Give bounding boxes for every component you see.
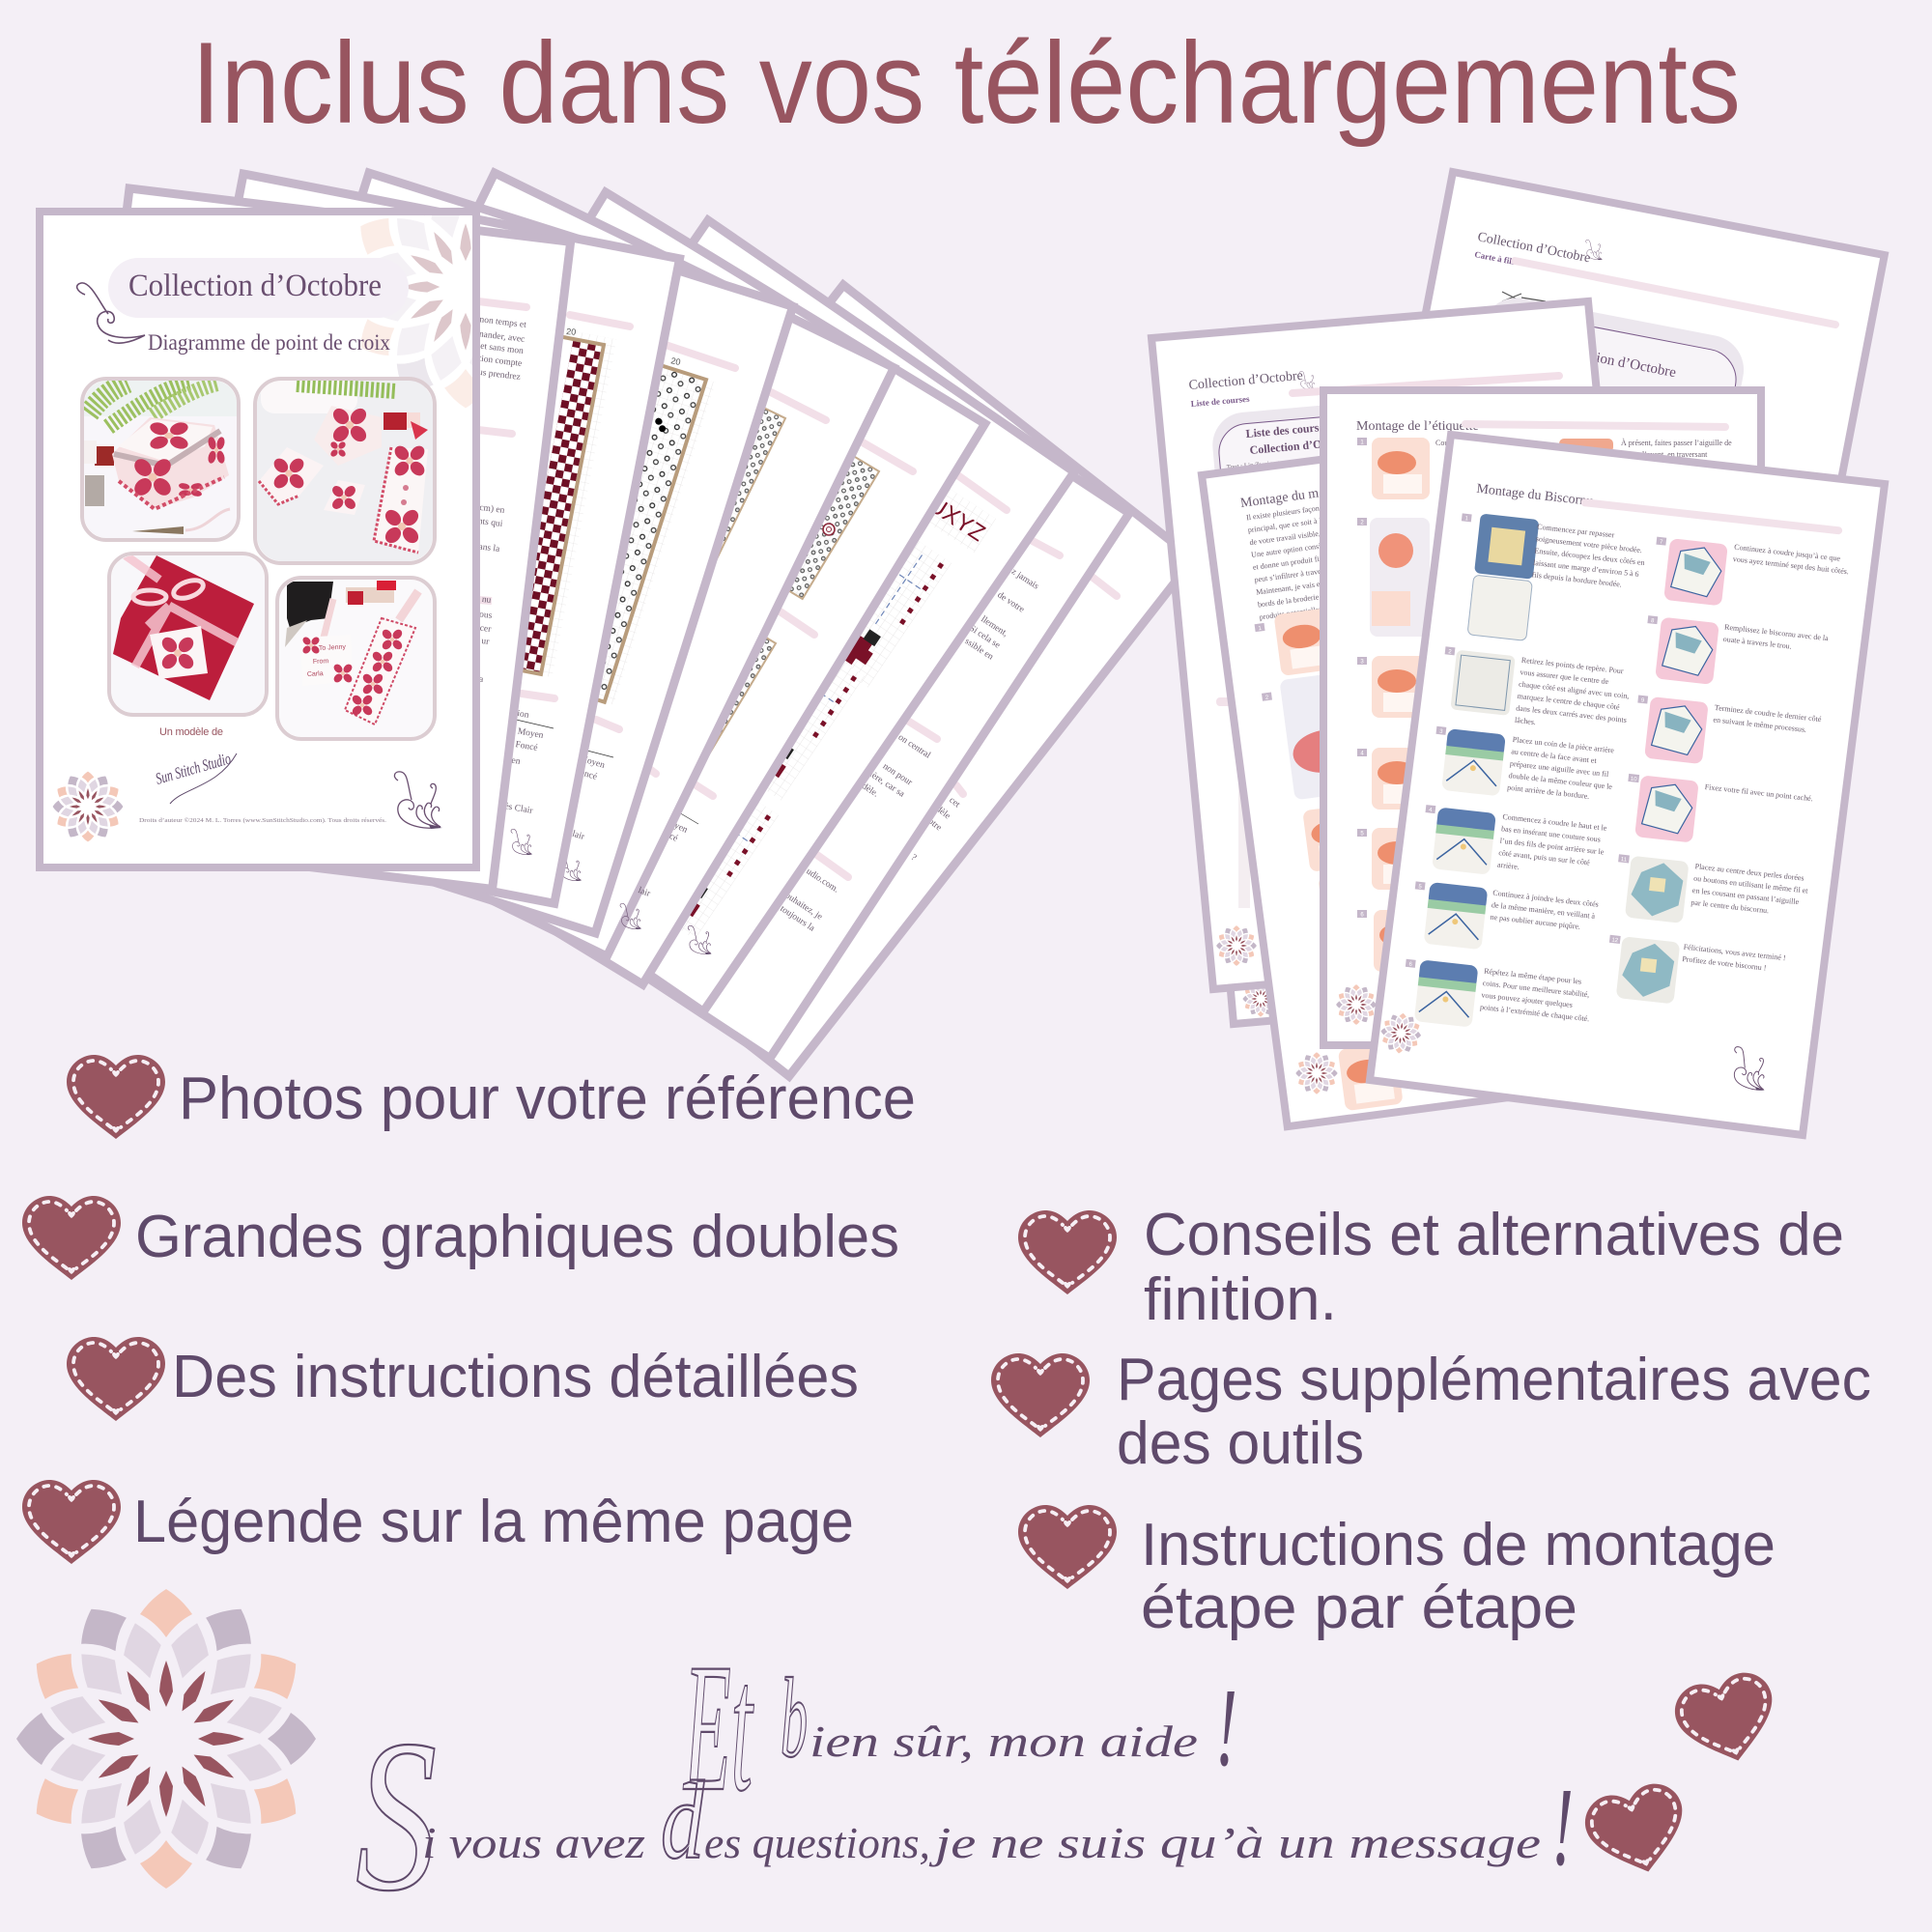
right column steps: ou boutons en utilisant le même fil et xyxy=(1693,874,1809,895)
page: montage du manchon: peut s’infiltrer à travers xyxy=(1254,566,1327,584)
page behind shopping list xyxy=(1176,333,1623,1024)
page 4 xyxy=(208,173,894,956)
photo: trio of ornaments xyxy=(255,379,437,564)
right column steps xyxy=(1604,534,1851,1018)
page: liste de courses: Collection d’Octobre xyxy=(1188,369,1303,393)
cover flourish xyxy=(77,283,145,343)
heart: tilted upper xyxy=(1669,1666,1786,1774)
page 8: ? xyxy=(909,853,918,863)
page: montage du manchon: et donne un produit fini xyxy=(1252,554,1326,572)
bullet: finishing tips: finition. xyxy=(1144,1266,1337,1333)
left column steps: l’un des fils de point arrière sur le xyxy=(1499,837,1605,857)
page 8: dèle xyxy=(934,805,952,821)
title pill xyxy=(108,258,409,318)
page: montage du manchon: bords de la broderie. Ces xyxy=(1257,590,1335,610)
page: montage du manchon: 2 xyxy=(1265,695,1269,701)
chart strip xyxy=(776,456,879,599)
chart strip xyxy=(581,388,785,714)
page 5: Moyen xyxy=(661,815,689,836)
panel: finishing instruction pages xyxy=(1151,172,1885,1135)
left column steps: vous pouvez ajouter quelques xyxy=(1481,990,1573,1009)
page 7: non pour xyxy=(881,762,915,788)
photo: pillow and bookmark: From xyxy=(313,658,329,666)
page: montage de l'étiquette: 2 xyxy=(1360,520,1364,526)
page 1: cm) en xyxy=(479,502,505,516)
left column steps: Commencez par repasser xyxy=(1537,523,1615,539)
page 7: Si cela se xyxy=(967,624,1002,651)
page 5 xyxy=(264,192,985,984)
right column steps: Placez au centre deux perles dorées xyxy=(1694,862,1804,883)
page: montage de l'étiquette: Montage de l’étiquette xyxy=(1356,419,1479,434)
bullet: instructions: Des instructions détaillées xyxy=(172,1344,859,1410)
page 7: toujours la xyxy=(779,904,816,934)
mandala logo xyxy=(0,1578,345,1899)
page: carte à fils: Collection d’Octobre xyxy=(1553,343,1678,381)
page 3: 20 xyxy=(670,355,681,367)
photo: pillow and bookmark: Carla xyxy=(307,670,324,678)
left column steps: coins. Pour une meilleure stabilité, xyxy=(1482,979,1590,999)
page 5: Foncé xyxy=(655,826,679,844)
page 8: cet xyxy=(947,796,962,810)
page 3: Clair xyxy=(565,828,586,842)
bullet: extra pages xyxy=(991,1347,1871,1477)
copyright: Droits d’auteur ©2024 M. L. Torres (www.SunStitchStudio.com). Tous droits réservés. xyxy=(139,817,386,824)
right column steps: par le centre du biscornu. xyxy=(1690,898,1770,915)
left column steps: laissant une marge d’environ 5 à 6 xyxy=(1533,558,1639,579)
left column steps: Ensuite, découpez les deux côtés en xyxy=(1534,547,1645,567)
left column steps: chaque côté est aligné avec un coin, xyxy=(1519,680,1630,700)
page 3: Moyen xyxy=(578,753,606,771)
script line two: d xyxy=(661,1759,704,1882)
page 2: Très Clair xyxy=(496,801,534,816)
page 1: cer xyxy=(479,624,493,635)
right column steps: ouate à travers le trou. xyxy=(1722,635,1792,651)
page: montage du manchon xyxy=(1202,417,1728,1126)
page 2 xyxy=(118,174,680,903)
left column steps: Répétez la même étape pour les xyxy=(1484,967,1582,986)
bullet: finishing tips: Conseils et alternatives de xyxy=(1144,1202,1844,1268)
page: carte à fils: Collection d’Octobre xyxy=(1476,230,1592,266)
page 2: 20 xyxy=(566,327,577,337)
page 1: ous xyxy=(479,610,493,621)
page 3 xyxy=(172,173,793,933)
script line two xyxy=(355,1696,1574,1932)
page 7: z jamais xyxy=(1009,567,1040,592)
signature xyxy=(154,750,237,804)
bullet: finishing tips xyxy=(1018,1202,1844,1333)
panel: fan of pattern pages xyxy=(51,173,1193,1076)
swirl xyxy=(620,903,641,929)
script line one: ien sûr, mon aide xyxy=(810,1717,1198,1766)
left column steps: lâches. xyxy=(1515,716,1536,726)
page: liste de courses: Tout : Lin Zweigart xyxy=(1226,459,1280,471)
page 1: a xyxy=(478,675,485,685)
page 3: Foncé xyxy=(574,767,598,782)
page 1: nander, avec xyxy=(478,329,526,345)
cross-stitch chart xyxy=(446,319,616,677)
page 7: ssible en xyxy=(963,637,995,663)
script line one: b xyxy=(781,1655,808,1781)
page: montage du manchon: de votre travail visible, ce xyxy=(1249,527,1330,547)
left column steps: 5 xyxy=(1418,884,1423,891)
page: liste de courses: Liste de courses xyxy=(1190,394,1250,409)
page 2: tion xyxy=(514,709,529,721)
left column steps: fils depuis la bordure brodée. xyxy=(1531,570,1622,589)
page 1: nu xyxy=(481,595,492,606)
bullet: charts: Grandes graphiques doubles xyxy=(135,1204,899,1270)
page: montage du manchon: Montage du manchon xyxy=(1239,481,1358,511)
chart strips xyxy=(645,529,952,940)
page: montage de l'étiquette: Coupez xyxy=(1435,439,1460,447)
left column steps: Commencez à coudre le haut et le xyxy=(1502,812,1607,833)
page: montage du manchon: principal, que ce soit à la xyxy=(1247,516,1325,534)
watermark mandala xyxy=(360,215,472,408)
photo: gift box xyxy=(109,554,269,716)
icon: rose xyxy=(823,524,835,535)
left column steps xyxy=(1400,511,1648,1040)
left column steps: 2 xyxy=(1448,649,1453,656)
page: montage de l'étiquette: l’avant, en traversant xyxy=(1642,450,1708,459)
page: montage du manchon: Maintenant, je vais expliquer xyxy=(1256,577,1347,597)
script line one: Et xyxy=(683,1625,754,1830)
page mandala xyxy=(1375,1009,1428,1058)
left column steps: 6 xyxy=(1408,962,1413,968)
left column steps: arrière. xyxy=(1497,861,1520,871)
swirl xyxy=(560,855,582,881)
left column steps: Placez un coin de la pièce arrière xyxy=(1512,735,1615,754)
page: liste de courses: Liste des courses pour xyxy=(1245,417,1356,440)
bullet: assembly: Instructions de montage xyxy=(1141,1512,1776,1578)
right column steps: 11 xyxy=(1620,857,1628,864)
left column steps: vous assurer que le centre de xyxy=(1520,668,1609,686)
page: montage de l'étiquette: 5 xyxy=(1360,831,1364,837)
left column steps: au centre de la face avant et xyxy=(1511,747,1598,765)
page: carte à fils: Carte à fils xyxy=(1474,249,1517,267)
page: montage de l'étiquette: 6 xyxy=(1360,912,1364,918)
cover subtitle: Diagramme de point de croix xyxy=(148,330,390,355)
page: montage de l'étiquette: À présent, faites passer l’aiguille de xyxy=(1621,438,1732,447)
page: montage du manchon: produits potentiellement xyxy=(1259,603,1335,621)
small mandala logo xyxy=(45,769,130,844)
left column steps: ne pas oublier aucune piqûre. xyxy=(1490,913,1581,931)
photo: pillow and bookmark: To Jenny xyxy=(319,644,347,652)
page 7: dèle. xyxy=(860,781,880,800)
alphabet chart: UXYZ xyxy=(923,492,989,547)
left column steps: soigneusement votre pièce brodée. xyxy=(1535,534,1642,554)
right column steps: Continuez à coudre jusqu’à ce que xyxy=(1734,543,1841,563)
bullet: assembly xyxy=(1018,1505,1776,1641)
left column steps: Retirez les points de repère. Pour xyxy=(1520,656,1624,675)
page 7: ière, car sa xyxy=(867,770,906,800)
page 7: llement, xyxy=(979,614,1009,639)
page: montage du manchon: Une autre option consiste xyxy=(1251,540,1330,559)
photo: biscornu xyxy=(82,378,242,542)
page 7: udio.com. xyxy=(804,867,840,895)
bullet: instructions xyxy=(67,1337,859,1421)
left column steps: double de la même couleur que le xyxy=(1508,771,1613,791)
left column steps: côté avant, puis un sur le côté xyxy=(1498,848,1591,867)
page 1: tion compte xyxy=(478,355,523,369)
right column steps: 10 xyxy=(1630,777,1637,782)
bullet: assembly: étape par étape xyxy=(1141,1575,1577,1641)
chart strip xyxy=(674,628,776,768)
page: carte à fils xyxy=(1327,172,1885,907)
right column steps: 8 xyxy=(1651,618,1655,624)
page 7: on central xyxy=(896,733,932,761)
right column steps: 9 xyxy=(1641,697,1645,704)
left column steps: marquez le centre de chaque côté xyxy=(1517,692,1621,712)
script line two: es questions, xyxy=(704,1818,930,1867)
right column steps: en suivant le même processus. xyxy=(1713,715,1807,734)
bullet: extra pages: des outils xyxy=(1117,1410,1364,1477)
script line one xyxy=(683,1625,1237,1830)
script line two: i vous avez xyxy=(422,1818,645,1867)
page 6 xyxy=(337,220,1074,1011)
page 2: le Foncé xyxy=(506,738,538,753)
page: liste de courses xyxy=(1151,301,1650,989)
cover heading: Collection d’Octobre xyxy=(128,269,382,303)
page 1: ans la xyxy=(478,542,501,554)
page 8: otre xyxy=(926,816,943,833)
page 2: en xyxy=(511,756,521,767)
page 8 xyxy=(439,285,1193,1076)
swirl xyxy=(688,925,712,954)
left column steps: dans les deux carrés avec des points xyxy=(1516,703,1627,724)
page 7: de votre xyxy=(995,590,1026,615)
cross-stitch chart xyxy=(503,348,716,705)
page: montage du manchon: 1 xyxy=(1258,626,1263,632)
page 1: us prendrez xyxy=(477,368,521,383)
page heading: Montage du Biscornu xyxy=(1476,482,1594,509)
left column steps: Continuez à joindre les deux côtés xyxy=(1492,889,1599,909)
title: Inclus dans vos téléchargements xyxy=(191,18,1741,148)
page: montage de l'étiquette xyxy=(1323,390,1761,1045)
left column steps: 3 xyxy=(1439,729,1443,735)
right column steps: Fixez votre fil avec un point caché. xyxy=(1704,782,1813,803)
script line two: S xyxy=(355,1696,437,1932)
bullet: extra pages: Pages supplémentaires avec xyxy=(1117,1347,1871,1413)
page: montage du biscornu xyxy=(1370,435,1885,1135)
page: montage de l'étiquette: 1 xyxy=(1360,440,1364,446)
page 1: net sans mon xyxy=(475,341,525,356)
bullet: photos: Photos pour votre référence xyxy=(179,1065,916,1132)
page: montage de l'étiquette: 4 xyxy=(1360,752,1364,757)
designer credit: Un modèle de xyxy=(159,726,223,738)
alphabet chart xyxy=(919,483,996,553)
script line one: ! xyxy=(1215,1665,1237,1789)
page: montage de l'étiquette: 3 xyxy=(1360,659,1364,665)
panel: cover page xyxy=(36,208,480,871)
left column steps: 4 xyxy=(1429,808,1433,813)
heart: tilted lower xyxy=(1579,1777,1696,1885)
right column steps: en les cousant en passant l’aiguille xyxy=(1691,886,1800,906)
right column steps: Remplissez le biscornu avec de la xyxy=(1724,622,1830,642)
photo: pillow and bookmark xyxy=(277,578,437,740)
right column steps: Terminez de coudre le dernier côté xyxy=(1714,703,1822,724)
right column steps: 7 xyxy=(1660,539,1663,546)
page 1: ur xyxy=(481,637,491,647)
swirl xyxy=(394,772,442,829)
swirl xyxy=(1730,1046,1770,1092)
left column steps: de la même manière, en veillant à xyxy=(1492,900,1596,921)
page: liste de courses: Collection d’Octobre xyxy=(1249,435,1354,457)
signature: Sun Stitch Studio xyxy=(154,750,233,788)
page 1 xyxy=(51,188,571,889)
right column steps: Profitez de votre biscornu ! xyxy=(1682,954,1767,973)
page 7: ouhaitez, je xyxy=(783,891,824,923)
left column steps: points à l’extrémité de chaque côté. xyxy=(1480,1003,1590,1023)
right column steps: 12 xyxy=(1611,938,1619,944)
page 1: nts qui xyxy=(477,517,503,529)
bullet: legend: Légende sur la même page xyxy=(133,1489,854,1555)
page 1: mon temps et xyxy=(476,315,527,330)
page 2: lle Moyen xyxy=(505,724,544,741)
left column steps: préparez une aiguille avec un fil xyxy=(1510,759,1610,779)
page: montage du manchon: Il existe plusieurs façons de xyxy=(1246,502,1332,522)
bullet: photos xyxy=(67,1055,916,1139)
left column steps: bas en insérant une couture sous xyxy=(1501,824,1601,844)
script line two: ! xyxy=(1551,1765,1574,1889)
right column steps: Félicitations, vous avez terminé ! xyxy=(1683,943,1786,962)
right column steps: vous ayez terminé sept des huit côtés. xyxy=(1732,554,1849,576)
bullet: legend xyxy=(22,1480,854,1564)
swirl xyxy=(511,829,532,855)
page 7 xyxy=(399,269,1129,1059)
left column steps: 1 xyxy=(1464,516,1469,523)
left column steps: point arrière de la bordure. xyxy=(1507,783,1590,801)
script line two: je ne suis qu’à un message xyxy=(929,1818,1541,1867)
page 4: lair xyxy=(637,886,652,899)
bullet: charts xyxy=(22,1196,899,1280)
